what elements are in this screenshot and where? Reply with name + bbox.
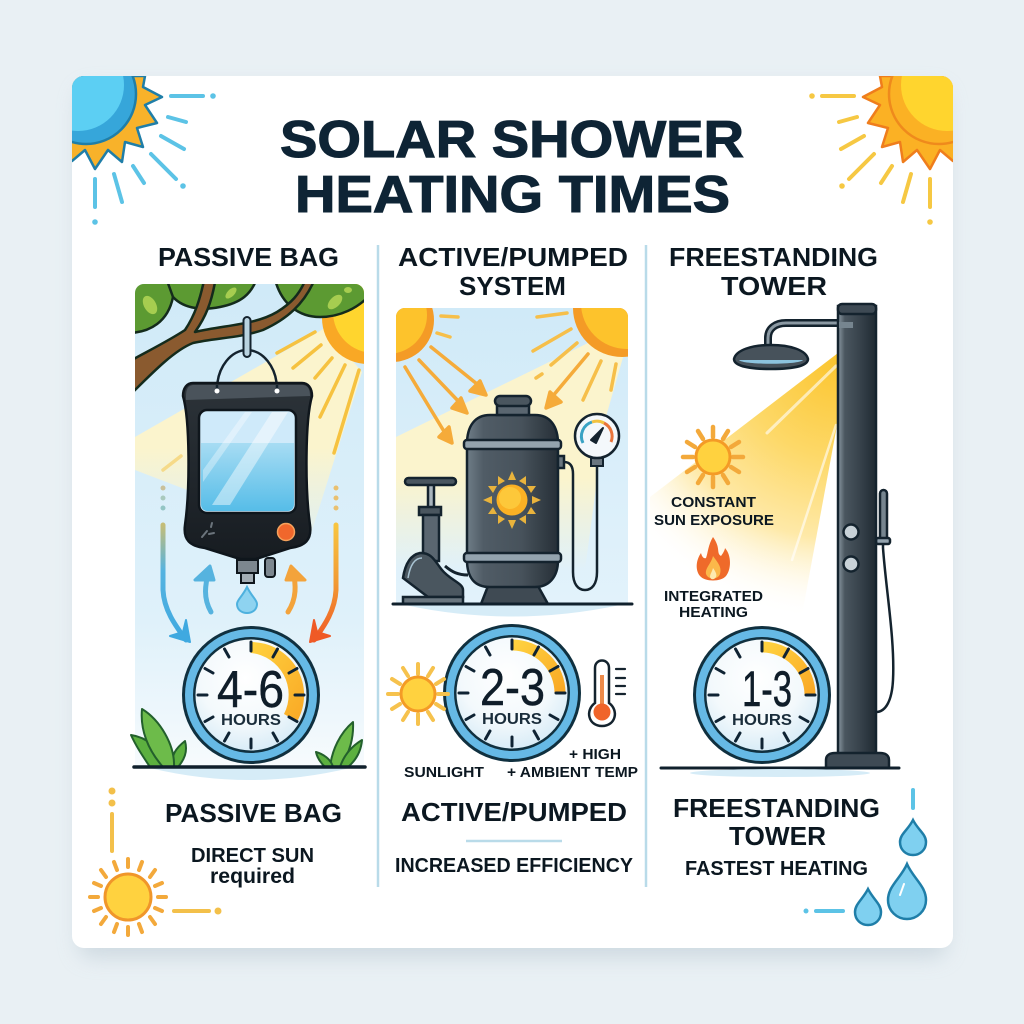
clock: 2-3 hours [443, 624, 581, 762]
clock: 4-6 hours [182, 626, 320, 764]
card [72, 76, 953, 948]
summary: passive bag [165, 798, 342, 888]
labels: sunlight and ambient temp: + AMBIENT TEMP [507, 764, 638, 781]
ground line [661, 766, 899, 770]
label: integrated heating [664, 589, 763, 621]
heading: active pumped system: SYSTEM [459, 271, 566, 301]
icon: water drops bottom right [804, 790, 926, 925]
arrow: blue cooling arrow [160, 486, 214, 642]
panel: freestanding tower illustration [650, 304, 899, 777]
labels: sunlight and ambient temp [404, 746, 638, 781]
label: integrated heating: HEATING [679, 605, 748, 621]
icon: solar bag [183, 383, 312, 583]
sun beam and sun [135, 284, 364, 531]
title: SOLAR SHOWER [280, 111, 744, 169]
clock: 4-6 hours: 4-6 [217, 661, 284, 719]
heading: freestanding tower [669, 242, 878, 301]
icon: thermometer [589, 660, 625, 726]
clock: 2-3 hours: HOURS [482, 711, 542, 728]
summary: freestanding tower [673, 793, 880, 880]
summary: active pumped: ACTIVE/PUMPED [401, 797, 627, 827]
summary: passive bag: required [210, 865, 295, 888]
summary: freestanding tower: FREESTANDING [673, 793, 880, 823]
ground line [134, 765, 365, 769]
icon: pressure gauge [564, 414, 619, 590]
label: constant sun exposure: SUN EXPOSURE [654, 513, 774, 529]
icon: plants [131, 709, 362, 767]
sun beam [650, 353, 838, 636]
suns and sun rays [396, 308, 628, 554]
heading: passive bag: PASSIVE BAG [158, 242, 339, 272]
labels: sunlight and ambient temp: + HIGH [569, 746, 621, 763]
icon: yellow sun top right [809, 76, 953, 225]
label: constant sun exposure: CONSTANT [671, 495, 756, 511]
icon: sun left of clock [388, 664, 448, 724]
heading: freestanding tower: TOWER [721, 271, 827, 301]
arrow: orange heating arrow [286, 486, 338, 642]
clock: 1-3 hours [693, 626, 831, 764]
clock: 2-3 hours: 2-3 [480, 659, 545, 717]
icon: pressure tank [464, 396, 564, 604]
icon: sun emblem on tank [483, 471, 541, 529]
heading: active pumped system [398, 242, 628, 301]
title [280, 111, 744, 224]
heading: freestanding tower: FREESTANDING [669, 242, 878, 272]
ground line [393, 602, 632, 606]
label: integrated heating: INTEGRATED [664, 589, 763, 605]
icon: small sun bottom left [90, 790, 220, 935]
summary: passive bag: DIRECT SUN [191, 845, 314, 867]
icon: shower tower [734, 304, 893, 768]
heading: active pumped system: ACTIVE/PUMPED [398, 242, 628, 272]
summary: freestanding tower: FASTEST HEATING [685, 858, 868, 880]
icon: blue sun top left [72, 76, 216, 225]
clock: 1-3 hours: 1-3 [742, 661, 792, 717]
clock: 1-3 hours: HOURS [732, 712, 792, 729]
icon: foot pump [403, 478, 468, 604]
icon: flame [697, 537, 730, 580]
hook [217, 317, 277, 390]
icon: sun constant exposure [683, 427, 743, 487]
clock: 4-6 hours: HOURS [221, 712, 281, 729]
panel: active pumped illustration [392, 308, 634, 616]
summary: passive bag: PASSIVE BAG [165, 798, 342, 828]
summary: active pumped [395, 797, 634, 877]
summary: freestanding tower: TOWER [729, 821, 826, 851]
icon: water drop [237, 587, 257, 613]
summary: active pumped: INCREASED EFFICIENCY [395, 855, 634, 877]
infographic [72, 76, 953, 963]
panel: passive bag illustration [90, 257, 926, 935]
title: HEATING TIMES [295, 166, 730, 224]
tree branch and leaves [135, 284, 364, 392]
labels: sunlight and ambient temp: SUNLIGHT [404, 764, 484, 781]
label: constant sun exposure [654, 495, 774, 529]
